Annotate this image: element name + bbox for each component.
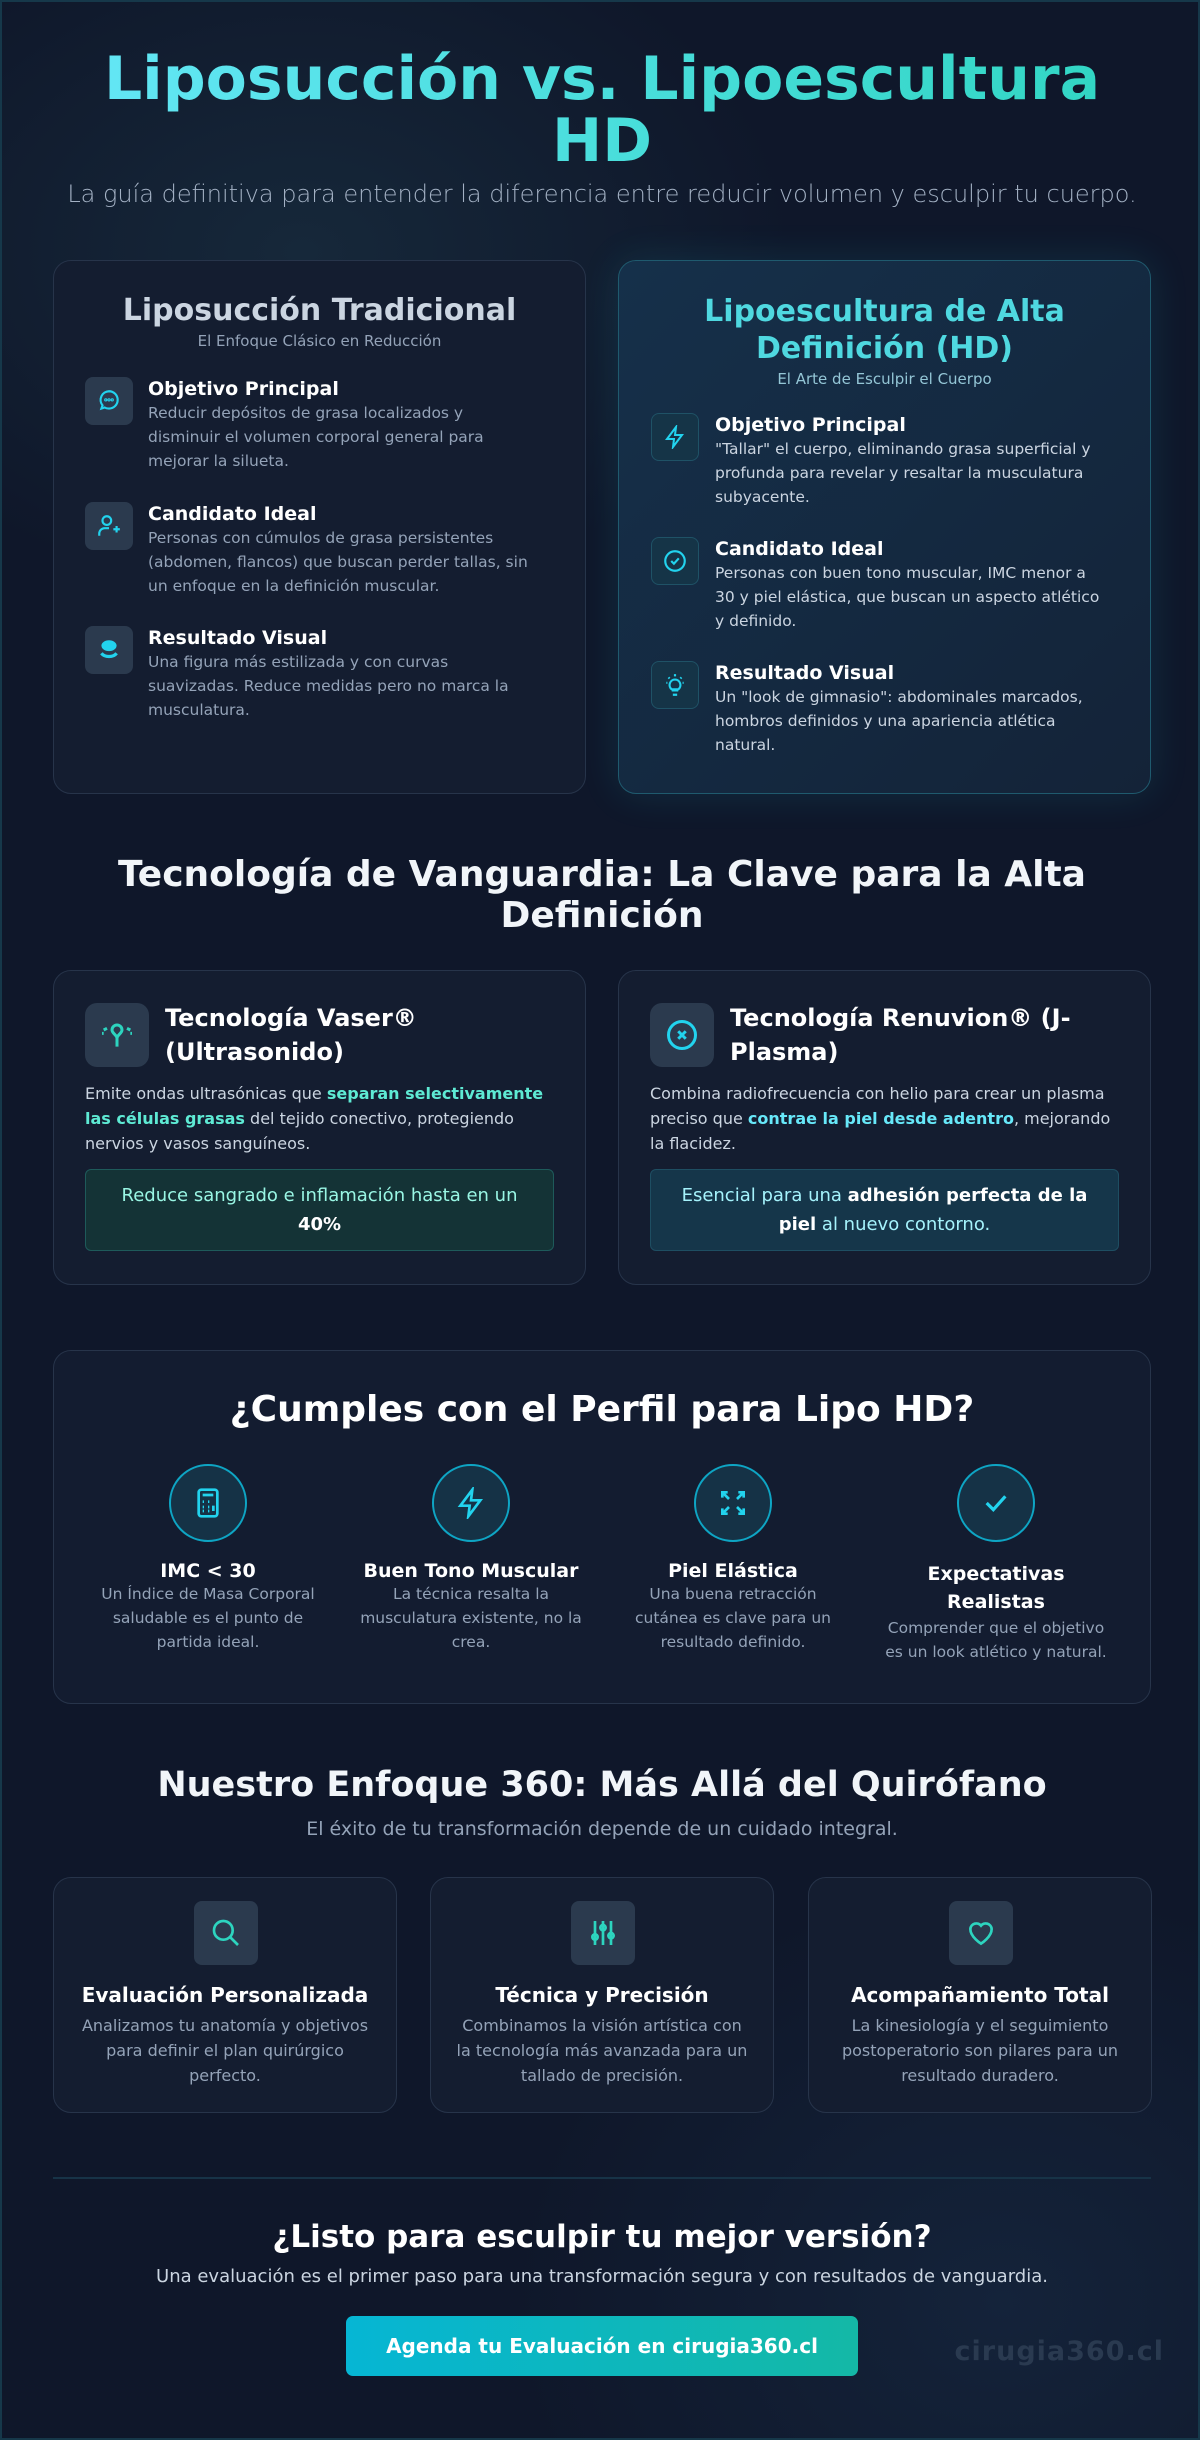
item: candidato: Candidato Ideal: [148, 503, 316, 525]
criterion: expectativas: Comprender que el objetivo es un look atlético y natural.: [885, 1619, 1107, 1661]
card: acompañamiento: Acompañamiento Total: [851, 1983, 1109, 2007]
item: objetivo: Objetivo Principal: [715, 414, 906, 436]
item: objetivo: [85, 377, 484, 470]
item: resultado: Un "look de gimnasio": abdominales marcados, hombros definidos y una apariencia atlética natural.: [715, 688, 1083, 754]
title: Plasma): [730, 1038, 838, 1066]
CTA button: [346, 2316, 858, 2376]
heading: tecnología: Tecnología de Vanguardia: La Clave para la Alta: [118, 854, 1086, 895]
criterion: piel elástica: Piel Elástica: [668, 1560, 798, 1582]
callout: piel al nuevo contorno.: [779, 1214, 990, 1235]
item: objetivo: Reducir depósitos de grasa localizados y disminuir el volumen corporal general para mejorar la silueta.: [148, 404, 484, 470]
callout: [650, 1169, 1119, 1251]
title: HD: [552, 106, 652, 176]
heading: El Arte de Esculpir el Cuerpo: [777, 370, 992, 388]
panel: perfil lipo HD: [53, 1350, 1151, 1704]
criterion: tono muscular: Buen Tono Muscular: [364, 1560, 578, 1582]
heading: enfoque 360: Nuestro Enfoque 360: Más Allá del Quirófano: [157, 1765, 1047, 1805]
title: (Ultrasonido): [165, 1038, 344, 1066]
card: evaluación: [53, 1877, 397, 2113]
subtitle: La guía definitiva para entender la diferencia entre reducir volumen y esculpir tu cuerpo.: [67, 180, 1137, 208]
heading: [704, 294, 1065, 388]
card: técnica: Técnica y Precisión: [495, 1983, 709, 2007]
title: Liposucción vs. Lipoescultura: [104, 44, 1100, 114]
criterion: IMC: IMC < 30: [160, 1560, 256, 1582]
CTA heading: ¿Listo para esculpir tu mejor versión?: [272, 2219, 932, 2255]
description: Emite ondas ultrasónicas que separan selectivamente las células grasas del tejido conectivo, protegiendo nervios y vasos sanguíneos.: [85, 1084, 543, 1153]
criterion: piel elástica: Una buena retracción cutánea es clave para un resultado definido.: [635, 1585, 831, 1651]
criterion: tono muscular: La técnica resalta la musculatura existente, no la crea.: [360, 1585, 582, 1651]
criterion: expectativas: Expectativas: [928, 1563, 1064, 1585]
watermark: cirugia360.cl: [955, 2336, 1164, 2367]
description: Combina radiofrecuencia con helio para crear un plasma preciso que contrae la piel desde adentro, mejorando la flacidez.: [650, 1084, 1110, 1153]
heading: ¿Cumples con el Perfil para Lipo HD?: [230, 1389, 974, 1430]
heading: Liposucción Tradicional: [123, 293, 516, 328]
item: candidato: [85, 502, 528, 595]
callout: 40%: [298, 1214, 341, 1235]
icon: search: [194, 1901, 258, 1965]
heading: tecnología: [118, 854, 1086, 936]
criterion: tono muscular: [360, 1464, 582, 1651]
criterion: IMC: Un Índice de Masa Corporal saludable es el punto de partida ideal.: [101, 1585, 315, 1651]
icon: vaser: [85, 1003, 149, 1067]
title: [730, 1004, 1071, 1066]
item: resultado: Una figura más estilizada y con curvas suavizadas. Reduce medidas pero no marca la musculatura.: [148, 653, 509, 719]
heading: El Enfoque Clásico en Reducción: [198, 332, 441, 350]
card: acompañamiento: La kinesiología y el seguimiento postoperatorio son pilares para un resultado duradero.: [842, 2016, 1118, 2085]
card: técnica: [430, 1877, 774, 2113]
panel: renuvion: [618, 970, 1151, 1285]
heading: tecnología: Definición: [500, 895, 704, 936]
item: resultado: [651, 661, 1083, 754]
card: evaluación: Evaluación Personalizada: [82, 1983, 368, 2007]
icon: heart: [949, 1901, 1013, 1965]
panel: liposucción tradicional: [53, 260, 586, 794]
item: objetivo: Objetivo Principal: [148, 378, 339, 400]
title: [165, 1004, 417, 1066]
callout: Esencial para una adhesión perfecta de la: [682, 1185, 1087, 1206]
icon: sliders: [571, 1901, 635, 1965]
item: candidato: Personas con buen tono muscular, IMC menor a 30 y piel elástica, que buscan un aspecto atlético y definido.: [715, 564, 1099, 630]
CTA button: Agenda tu Evaluación en cirugia360.cl: [386, 2334, 818, 2358]
title: Tecnología Vaser®: [165, 1004, 417, 1032]
icon: renuvion: [650, 1003, 714, 1067]
criterion: expectativas: Realistas: [947, 1591, 1045, 1613]
heading: Definición (HD): [756, 331, 1013, 366]
title: Tecnología Renuvion® (J-: [730, 1004, 1071, 1032]
criterion: IMC: [101, 1464, 315, 1651]
heading: Lipoescultura de Alta: [704, 294, 1065, 329]
item: candidato: Personas con cúmulos de grasa persistentes (abdomen, flancos) que buscan perder tallas, sin un enfoque en la definición muscular.: [148, 529, 528, 595]
criterion: expectativas: [885, 1464, 1107, 1661]
card: evaluación: Analizamos tu anatomía y objetivos para definir el plan quirúrgico perfecto.: [82, 2016, 368, 2085]
panel: lipoescultura HD: [618, 260, 1151, 794]
CTA text: Una evaluación es el primer paso para una transformación segura y con resultados de vanguardia.: [156, 2266, 1048, 2287]
card: técnica: Combinamos la visión artística con la tecnología más avanzada para un tallado de precisión.: [457, 2016, 747, 2085]
panel: vaser: [53, 970, 586, 1285]
item: objetivo: [651, 413, 1091, 506]
callout: [85, 1169, 554, 1251]
subheading: El éxito de tu transformación depende de un cuidado integral.: [306, 1818, 898, 1840]
item: candidato: Candidato Ideal: [715, 538, 883, 560]
title: [2, 48, 1200, 172]
card: acompañamiento: [808, 1877, 1152, 2113]
item: resultado: Resultado Visual: [148, 627, 327, 649]
item: resultado: Resultado Visual: [715, 662, 894, 684]
item: candidato: [651, 537, 1099, 630]
heading: [123, 293, 516, 350]
item: resultado: [85, 626, 509, 719]
criterion: piel elástica: [635, 1464, 831, 1651]
item: objetivo: "Tallar" el cuerpo, eliminando grasa superficial y profunda para revelar y resaltar la musculatura subyacente.: [715, 440, 1091, 506]
callout: Reduce sangrado e inflamación hasta en un: [122, 1185, 517, 1206]
